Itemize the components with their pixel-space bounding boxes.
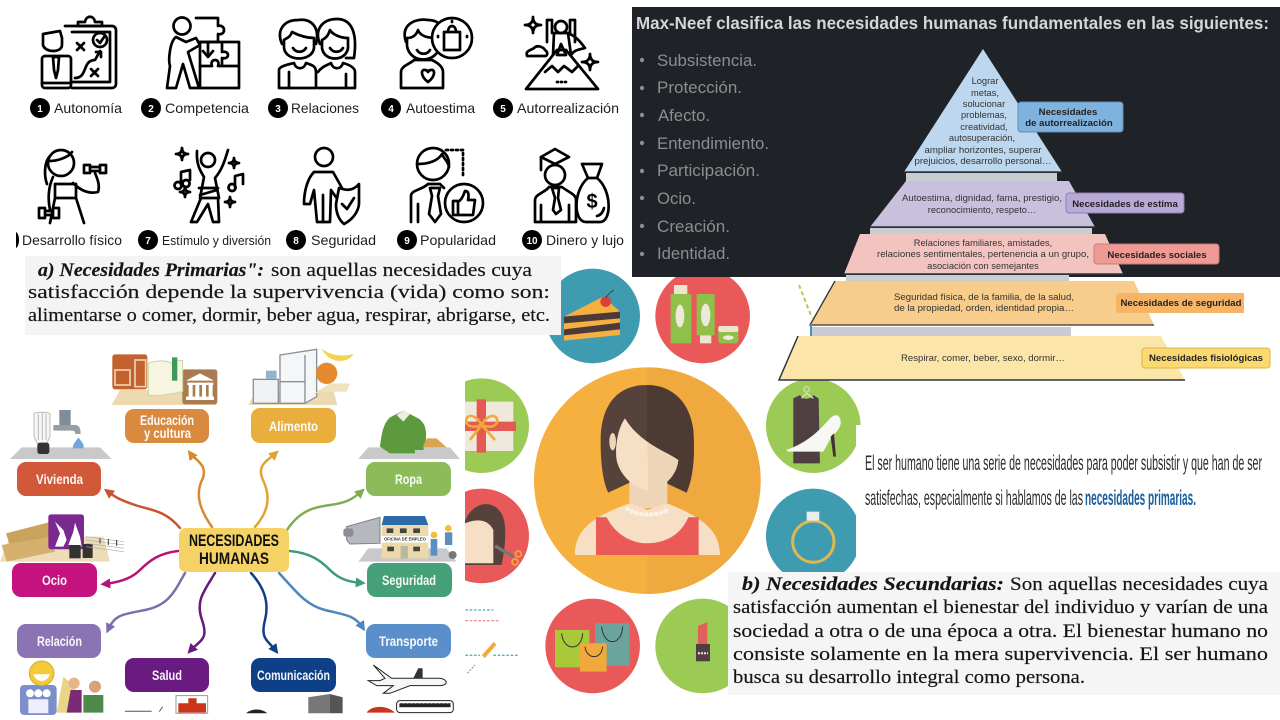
circle: cosmetics [655, 269, 750, 363]
list: needs [640, 51, 769, 263]
node: Alimento: Alimento [269, 418, 318, 434]
decoration: small dashes [465, 610, 519, 673]
tier: seguridad: Seguridad física, de la familia, de la salud, [894, 292, 1074, 302]
icon: autoestima [401, 18, 472, 88]
illustration: comunicación [246, 694, 343, 713]
circle: hair cut [434, 489, 529, 583]
label: 3 Relaciones [268, 98, 359, 118]
node: Ropa: Ropa [395, 471, 422, 487]
illustration: ocio [0, 514, 124, 562]
text block: necesidades secundarias: satisfacción aumentan el bienestar del individuo y varían de una [733, 597, 1269, 618]
label: fisiológicas [1142, 348, 1270, 368]
label: 4 Autoestima [381, 98, 475, 118]
chart: Maslow pyramid [779, 49, 1270, 380]
label: 2 Competencia: 2 [148, 104, 154, 115]
node: Educación y cultura: y cultura [144, 425, 191, 441]
label: 8 Seguridad [286, 230, 376, 250]
tier: fisiológicas [779, 336, 1185, 380]
tier: seguridad: de la propiedad, orden, identidad propia… [894, 303, 1074, 313]
node: Ocio [12, 563, 97, 597]
panel: Max-Neef dark [632, 7, 1280, 277]
label: 10 Dinero y lujo: Dinero y lujo [546, 232, 624, 248]
illustration: educación [112, 354, 217, 405]
label: 10 Dinero y lujo [522, 230, 624, 250]
node: Educación y cultura [125, 409, 209, 443]
tier: sociales: relaciones sentimentales, pertenencia a un grupo, [877, 249, 1089, 259]
list: needs: Creación. [657, 217, 730, 236]
tier: autorrealización: ampliar horizontes, superar [924, 145, 1042, 155]
node: Ocio: Ocio [42, 572, 67, 588]
node: Transporte: Transporte [379, 633, 438, 649]
list: needs: Participación. [657, 161, 760, 180]
label: 8 Seguridad: Seguridad [311, 232, 376, 248]
tier: autorrealización: Lograr [972, 76, 998, 86]
tier: autorrealización: autosuperación, [949, 133, 1015, 143]
label: 2 Competencia: Competencia [165, 100, 249, 116]
circle: cake [545, 269, 640, 363]
circle: gift [434, 378, 529, 473]
icon: popularidad [411, 148, 483, 222]
tier: autorrealización: solucionar [963, 99, 1005, 109]
tier: fisiológicas: Respirar, comer, beber, sexo, dormir… [901, 353, 1065, 363]
tier: estima: Autoestima, dignidad, fama, prestigio, [902, 193, 1062, 203]
label: 2 Competencia [141, 98, 249, 118]
node: Alimento [251, 408, 336, 443]
panel: mind map [0, 338, 465, 720]
tier: sociales: Relaciones familiares, amistades, [914, 238, 1052, 248]
illustration: transporte [367, 665, 453, 713]
label: 1 Autonomía [30, 98, 122, 118]
tier: autorrealización [904, 49, 1062, 181]
text block: necesidades primarias: satisfacción depende la supervivencia (vida) como son: [28, 282, 550, 303]
node: Relación [17, 624, 101, 658]
label: 1 Autonomía: 1 [37, 104, 43, 115]
list: needs: Protección. [657, 78, 742, 97]
tier: sociales: asociación con semejantes [927, 261, 1039, 271]
label: 10 Dinero y lujo: 10 [526, 236, 538, 247]
circle: shopping bags [545, 599, 640, 693]
illustration: salud [125, 696, 208, 713]
label: estima: Necesidades de estima [1072, 199, 1178, 210]
circle: lipstick [655, 599, 750, 693]
label: 8 Seguridad: 8 [293, 236, 299, 247]
text block: necesidades primarias [25, 256, 561, 335]
node: center Necesidades Humanas [179, 528, 289, 572]
heading: Max-Neef clasifica las necesidades humanas fundamentales en las siguientes: [636, 13, 1269, 33]
label: 9 Popularidad: Popularidad [420, 232, 496, 248]
icon: autorrealización [525, 17, 598, 89]
label: 7 Estímulo y diversión [138, 230, 271, 250]
node: Transporte [366, 624, 451, 658]
label: 9 Popularidad: 9 [404, 236, 410, 247]
node: center Necesidades Humanas: NECESIDADES [189, 531, 279, 550]
illustration: relación [20, 661, 103, 715]
list: needs: Subsistencia. [657, 51, 757, 70]
icon: dinero y lujo [535, 149, 609, 222]
list: needs: Ocio. [657, 189, 696, 208]
text block: necesidades primarias: son aquellas necesidades cuya [271, 260, 533, 281]
label: 5 Autorrealización: Autorrealización [517, 100, 619, 116]
icon: estímulo y diversión [175, 148, 243, 222]
icon: relaciones [279, 19, 355, 88]
list: needs: Afecto. [658, 106, 710, 125]
text block: necesidades secundarias: consiste solamente en la mera supervivencia. El ser humano [733, 644, 1268, 665]
label: 4 Autoestima: Autoestima [406, 100, 475, 116]
tier: autorrealización: metas, [971, 88, 999, 98]
icon: desarrollo físico [39, 150, 106, 223]
node: Comunicación: Comunicación [257, 667, 330, 683]
circle: ring [766, 489, 861, 583]
panel: ten motivations icons [16, 17, 624, 250]
portrait: woman [534, 367, 761, 594]
illustration: ropa [358, 411, 460, 459]
node: Ropa [366, 462, 451, 496]
node: Vivienda: Vivienda [36, 471, 83, 487]
label: 9 Popularidad [397, 230, 496, 250]
node: Educación y cultura: Educación [140, 412, 194, 428]
list: needs: Entendimiento. [657, 134, 769, 153]
label: 3 Relaciones: 3 [275, 104, 281, 115]
label: 5 Autorrealización: 5 [500, 104, 506, 115]
tier: sociales [844, 234, 1123, 274]
label: autorrealización: Necesidades [1039, 107, 1097, 118]
text block: necesidades secundarias: busca su desarrollo integral como persona. [733, 667, 1085, 688]
tier: autorrealización: prejuicios, desarrollo personal… [914, 156, 1052, 166]
icon: dinero y lujo: $ [586, 191, 598, 213]
label: seguridad: Necesidades de seguridad [1120, 298, 1242, 309]
label: 3 Relaciones: Relaciones [291, 100, 359, 116]
tier: seguridad [799, 275, 1154, 336]
icon: seguridad [304, 148, 359, 224]
text block: ser humano [856, 425, 1280, 572]
list: needs: Identidad. [657, 244, 730, 263]
node: Comunicación [251, 658, 336, 692]
illustration: alimento [248, 348, 353, 405]
illustration: seguridad: OFICINA DE EMPLEO [384, 537, 426, 542]
node: Seguridad: Seguridad [382, 572, 436, 588]
tier: autorrealización: problemas, [961, 110, 1007, 120]
text block: necesidades secundarias: b) Necesidades Secundarias: [742, 574, 1004, 595]
illustration: seguridad [343, 516, 457, 562]
label: 7 Estímulo y diversión: 7 [145, 236, 151, 247]
illustration: vivienda [10, 410, 112, 459]
label: estima [1066, 193, 1184, 213]
tier: estima: reconocimiento, respeto… [928, 205, 1036, 215]
text block: necesidades secundarias: Son aquellas necesidades cuya [1010, 574, 1269, 595]
label: sociales [1094, 244, 1219, 264]
node: Salud [125, 658, 209, 692]
icon: autonomía [42, 17, 116, 88]
node: Salud: Salud [152, 667, 182, 683]
label: 5 Autorrealización [493, 98, 619, 118]
arrows: center to needs [104, 453, 363, 651]
tier: autorrealización: creatividad, [960, 122, 1008, 132]
node: Relación: Relación [37, 633, 82, 649]
label: autorrealización: de autorrealización [1025, 118, 1113, 129]
panel: woman with needs circles [434, 269, 861, 693]
label: 7 Estímulo y diversión: Estímulo y diversión [162, 234, 271, 248]
node: Seguridad [367, 563, 452, 597]
label: autorrealización [1018, 102, 1123, 132]
label: fisiológicas: Necesidades fisiológicas [1149, 353, 1263, 364]
node: Vivienda [17, 462, 101, 496]
label: 6 Desarrollo físico: Desarrollo físico [22, 232, 122, 248]
tier: estima [870, 181, 1095, 234]
icon: competencia [167, 18, 239, 88]
node: center Necesidades Humanas: HUMANAS [199, 549, 269, 568]
text block: necesidades secundarias: sociedad a otra o de una época a otra. El bienestar humano no [733, 621, 1268, 642]
text block: necesidades primarias: a) Necesidades Primarias": [38, 260, 264, 281]
text block: necesidades secundarias [728, 572, 1280, 695]
label: 4 Autoestima: 4 [388, 104, 394, 115]
label: 1 Autonomía: Autonomía [54, 100, 122, 116]
text block: necesidades primarias: alimentarse o comer, dormir, beber agua, respirar, abrigarse, etc. [28, 305, 550, 326]
label: seguridad [1116, 293, 1244, 313]
circle: dress and shoe [766, 378, 861, 473]
label: sociales: Necesidades sociales [1107, 250, 1207, 261]
